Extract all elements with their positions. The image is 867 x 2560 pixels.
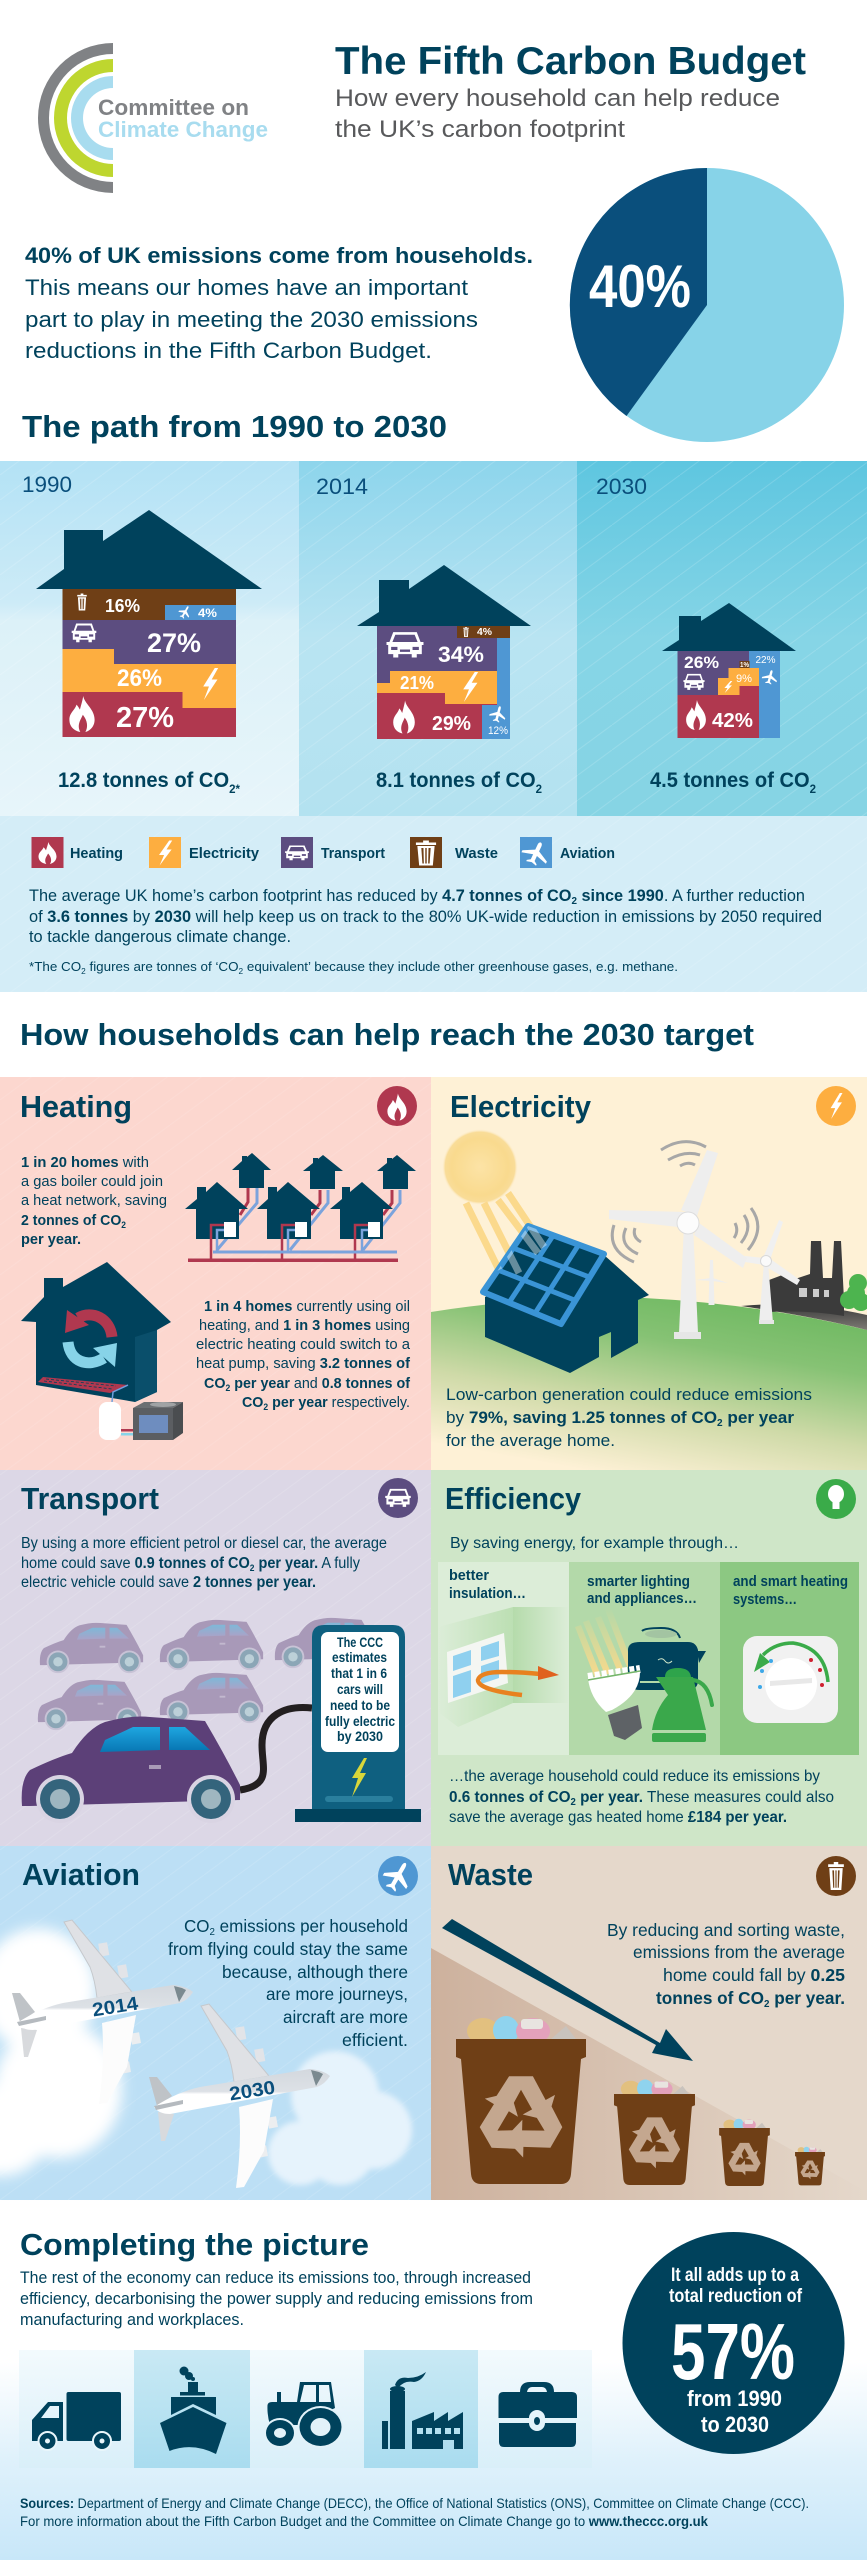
icon: tractor: [264, 2382, 344, 2448]
subtitle: How every household can help reduce: [335, 85, 780, 112]
text: transport: electric vehicle could save 2 tonnes per year.: [21, 1574, 316, 1591]
callout: CCC estimates: The CCC: [337, 1635, 383, 1650]
text: waste: emissions from the average: [633, 1942, 845, 1962]
house 2014: 21%: [400, 673, 434, 693]
callout: 57% total reduction: total reduction of: [669, 2286, 803, 2307]
text: aviation: CO: [184, 1916, 210, 1936]
column: smart heating systems: and smart heating: [733, 1573, 848, 1590]
text: waste: home could fall by 0.25: [663, 1965, 845, 1985]
column: smart heating systems: [720, 1562, 859, 1755]
tonnes label 1990: 2*: [229, 782, 240, 796]
tonnes label 1990: 12.8 tonnes of CO: [58, 769, 237, 792]
icon: heating: [377, 1086, 417, 1126]
explanation text: 2: [571, 896, 577, 907]
house 2030: 42%: [712, 710, 753, 732]
heading: efficiency: Efficiency: [445, 1481, 582, 1516]
callout: CCC estimates: need to be: [330, 1698, 390, 1713]
text: efficiency result: 0.6 tonnes of CO: [449, 1789, 571, 1806]
text: electricity: for the average home.: [446, 1431, 615, 1450]
legend: transport: Transport: [321, 845, 385, 862]
icon: efficiency: [816, 1479, 856, 1519]
text: transport: A fully: [322, 1555, 363, 1572]
text: electricity: Low-carbon generation could reduce emissions: [446, 1385, 812, 1404]
heading: waste: Waste: [448, 1857, 533, 1892]
text: heat network: 1 in 20 homes with: [21, 1154, 149, 1171]
legend: electricity: Electricity: [189, 845, 260, 862]
explanation text: since 1990: [577, 887, 664, 905]
icon: briefcase: [498, 2382, 577, 2447]
illustration: faded cars: [38, 1618, 378, 1730]
house 2014: 29%: [432, 713, 471, 735]
illustration: heat network houses: [185, 1153, 416, 1262]
text: efficiency intro: By saving energy, for example through…: [450, 1535, 739, 1552]
panel: heating: [0, 1077, 431, 1470]
house 2030: 9%: [736, 673, 752, 685]
column: better insulation: better: [449, 1567, 489, 1584]
subtitle: [335, 85, 780, 143]
house 1990: 26%: [117, 665, 162, 692]
text: electricity: per year: [723, 1408, 794, 1427]
text: heat network: a gas boiler could join: [21, 1173, 163, 1190]
panel: 1990: [0, 461, 299, 816]
text: heat pump: [196, 1298, 411, 1412]
text: waste: tonnes of CO: [656, 1988, 766, 2008]
legend: waste: [410, 837, 498, 868]
heading: heating: Heating: [20, 1089, 132, 1124]
text: heat pump: per year: [268, 1394, 328, 1411]
legend: heating: Heating: [70, 845, 123, 862]
text: heat network: 2: [121, 1220, 126, 1230]
heading: transport: Transport: [21, 1481, 159, 1516]
illustration: recycling bins: [456, 2016, 825, 2186]
text: transport: [21, 1535, 387, 1591]
illustration: plane 2014: 2014: [91, 1993, 140, 2021]
legend: waste: Waste: [455, 845, 498, 862]
text: aviation: efficient.: [342, 2030, 408, 2050]
text block: 40% of UK emissions: part to play in meeting the 2030 emissions: [25, 307, 478, 332]
text: waste: 2: [764, 1999, 770, 2010]
column: smart heating systems: systems…: [733, 1591, 797, 1608]
house 1990: [36, 510, 262, 737]
column: smarter lighting and appliances: smarter lighting: [587, 1573, 690, 1590]
text: waste: per year.: [769, 1988, 845, 2008]
panel: completing the picture: [0, 2200, 867, 2560]
column: better insulation: insulation…: [449, 1585, 526, 1602]
illustration: sun: [442, 1129, 518, 1205]
house 2030: 1%: [740, 662, 750, 669]
illustration: sun rays: [466, 1193, 544, 1273]
legend: aviation: Aviation: [560, 845, 615, 862]
text: efficiency result: [449, 1768, 834, 1826]
year label 2030: 2030: [596, 474, 647, 499]
text: heat network: per year.: [21, 1231, 81, 1248]
callout: 57% total reduction: [622, 2232, 844, 2454]
panel: efficiency: [431, 1470, 867, 1846]
year label 1990: 1990: [22, 472, 72, 497]
house 2030: 26%: [684, 653, 719, 672]
text block: 40% of UK emissions: This means our homes have an important: [25, 275, 468, 300]
house 2014: 4%: [477, 627, 492, 638]
text: heat pump: electric heating could switch to a: [196, 1336, 411, 1353]
text block: 40% of UK emissions: 40% of UK emissions come from households.: [25, 243, 533, 268]
heading: path: The path from 1990 to 2030: [22, 409, 447, 444]
footnote: 2: [239, 967, 244, 976]
logo: Committee on Climate Change: [38, 40, 268, 196]
text: heat pump: CO: [204, 1375, 226, 1392]
explanation text: . A further reduction: [664, 887, 807, 905]
legend: aviation: [519, 837, 615, 869]
panel: transport: [0, 1470, 431, 1846]
text block: 40% of UK emissions: [25, 243, 533, 363]
text: rest of economy: efficiency, decarbonising the power supply and reducing emissions from: [20, 2290, 533, 2308]
text: electricity: 2: [717, 1418, 723, 1429]
text: heat network: 2 tonnes of CO: [21, 1212, 128, 1229]
sources: For more information about the Fifth Carbon Budget and the Committee on Climate Change go to www.theccc.org.uk: [20, 2513, 708, 2529]
legend: electricity: [149, 837, 260, 868]
sources: Sources: Department of Energy and Climate Change (DECC), the Office of National Statistics (ONS), Committee on Climate Change (CCC).: [20, 2495, 809, 2511]
legend: heating: [32, 837, 123, 868]
tonnes label 2030: 2: [810, 782, 816, 796]
illustration: house with solar panel: [480, 1223, 649, 1373]
heading: how households can help: How households can help reach the 2030 target: [20, 1017, 754, 1052]
text: transport: home could save 0.9 tonnes of CO: [21, 1555, 258, 1572]
illustration: heat pump house: [21, 1262, 183, 1440]
text: transport: By using a more efficient petrol or diesel car, the average: [21, 1535, 387, 1552]
icon: truck: [32, 2392, 121, 2450]
illustration: plane 2030: [149, 2004, 330, 2188]
house 1990: 27%: [147, 628, 201, 658]
text: aviation: [168, 1916, 408, 2050]
tonnes label 2014: 8.1 tonnes of CO: [376, 769, 543, 792]
callout: CCC estimates: [325, 1635, 395, 1744]
panel: 2014: [299, 461, 577, 816]
callout: 57% total reduction: from 1990: [687, 2386, 782, 2411]
house 2014: 12%: [488, 725, 508, 737]
text: efficiency result: per year.: [576, 1789, 643, 1806]
text: heat pump: 2: [225, 1383, 230, 1393]
text: waste: [607, 1920, 845, 2010]
callout: CCC estimates: estimates: [332, 1650, 387, 1665]
house 2030: 22%: [756, 655, 776, 666]
panel: legend and explanation: [0, 816, 867, 992]
callout: CCC estimates: cars will: [337, 1682, 383, 1697]
text: electricity: by 79%, saving 1.25 tonnes of CO: [446, 1408, 715, 1427]
text: heat pump: 1 in 4 homes currently using oil: [204, 1298, 410, 1315]
footnote: equivalent’ because they include other greenhouse gases, e.g. methane.: [243, 959, 678, 974]
callout: CCC estimates: that 1 in 6: [331, 1666, 387, 1681]
house 1990: 16%: [105, 596, 140, 616]
text: rest of economy: The rest of the economy can reduce its emissions too, through increased: [20, 2269, 531, 2287]
panel: electricity: [431, 1077, 867, 1470]
subtitle: the UK’s carbon footprint: [335, 116, 625, 143]
illustration: plane 2014: [12, 1920, 193, 2104]
column: smarter lighting and appliances: and appliances…: [587, 1590, 697, 1607]
logo: Committee on Climate Change: Climate Change: [98, 117, 268, 142]
text: aviation: aircraft are more: [283, 2007, 408, 2027]
house 1990: 27%: [116, 702, 174, 734]
tonnes label 2014: 2: [536, 782, 542, 796]
text: heat pump: CO: [242, 1394, 264, 1411]
text: heat network: [21, 1154, 167, 1248]
text: waste: By reducing and sorting waste,: [607, 1920, 845, 1940]
footnote: *The CO: [29, 959, 80, 974]
house 2030: [662, 603, 796, 738]
illustration: wind turbines: [609, 1142, 800, 1339]
legend: transport: [281, 837, 385, 868]
illustration: clouds: [0, 1928, 412, 2185]
callout: 57% total reduction: It all adds up to a: [671, 2265, 799, 2286]
illustration: charging cable: [240, 1707, 312, 1790]
explanation text: to tackle dangerous climate change.: [29, 928, 291, 946]
text: heat pump: and 0.8 tonnes of: [294, 1375, 414, 1392]
explanation text: of 3.6 tonnes by 2030 will help keep us on track to the 80% UK-wide reduction in emissions by 2050 required: [29, 908, 822, 926]
panel: aviation: [0, 1846, 431, 2200]
icon: transport: [378, 1478, 418, 1518]
callout: CCC estimates: by 2030: [337, 1729, 383, 1744]
text: efficiency result: 2: [571, 1797, 576, 1808]
text: heat network: a heat network, saving: [21, 1192, 167, 1209]
text: efficiency result: …the average household could reduce its emissions by: [449, 1768, 820, 1785]
text: efficiency result: save the average gas heated home £184 per year.: [449, 1809, 787, 1826]
heading: completing the picture: Completing the picture: [20, 2227, 369, 2262]
text: efficiency result: These measures could also: [647, 1789, 843, 1806]
illustration: charging point: [295, 1625, 421, 1822]
icon tiles: [19, 2350, 592, 2468]
text: transport: per year.: [254, 1555, 318, 1572]
title: The Fifth Carbon Budget: [335, 40, 806, 83]
tonnes label 2030: 4.5 tonnes of CO: [650, 769, 817, 792]
icon: ship: [160, 2366, 226, 2454]
house 1990: 4%: [198, 606, 217, 620]
column: smarter lighting and appliances: [569, 1562, 720, 1755]
text: aviation: emissions per household: [215, 1916, 408, 1936]
text: rest of economy: manufacturing and workplaces.: [20, 2311, 244, 2329]
illustration: electric car: [22, 1717, 240, 1823]
text: rest of economy: [20, 2269, 533, 2329]
sources: [20, 2495, 809, 2529]
house 2014: 34%: [438, 642, 484, 667]
icon: waste: [816, 1856, 856, 1896]
explanation text: The average UK home’s carbon footprint has reduced by 4.7 tonnes of CO: [29, 887, 573, 905]
text: transport: 2: [250, 1563, 254, 1573]
pie chart: 40%: 40%: [589, 253, 691, 320]
icon: aviation: [378, 1856, 418, 1896]
heading: aviation: Aviation: [22, 1857, 140, 1892]
panel: 2030: [577, 461, 867, 816]
text block: 40% of UK emissions: reductions in the Fifth Carbon Budget.: [25, 338, 432, 363]
text: heat pump: 2: [263, 1402, 268, 1412]
heading: electricity: Electricity: [450, 1089, 592, 1124]
footnote: 2: [81, 967, 86, 976]
callout: 57% total reduction: to 2030: [701, 2412, 769, 2437]
illustration: hill: [431, 1298, 867, 1470]
illustration: plane 2030: 2030: [228, 2078, 277, 2105]
icon: electricity: [816, 1086, 856, 1126]
text: electricity: [446, 1385, 812, 1450]
panel: waste: [431, 1846, 867, 2200]
text: heat pump: heating, and 1 in 3 homes using: [199, 1317, 410, 1334]
arrow: falling waste: [442, 1919, 693, 2061]
pie chart: 40%: [570, 168, 844, 442]
year label 2014: 2014: [316, 474, 368, 499]
text: aviation: 2: [210, 1927, 215, 1938]
callout: CCC estimates: fully electric: [325, 1714, 395, 1729]
callout: 57% total reduction: 57%: [671, 2307, 795, 2396]
text: aviation: because, although there: [222, 1962, 408, 1982]
footnote: figures are tonnes of ‘CO: [86, 959, 239, 974]
icon: factory: [382, 2372, 463, 2449]
house 2014: [357, 565, 531, 739]
illustration: factory: [741, 1241, 867, 1330]
column: better insulation: [438, 1562, 569, 1755]
text: heat pump: heat pump, saving 3.2 tonnes of: [196, 1355, 411, 1372]
explanation text: [29, 887, 822, 946]
text: aviation: are more journeys,: [266, 1984, 408, 2004]
logo: Committee on Climate Change: Committee on: [98, 95, 249, 120]
text: aviation: from flying could stay the same: [168, 1939, 408, 1959]
text: heat pump: respectively.: [332, 1394, 414, 1411]
text: heat pump: per year: [230, 1375, 290, 1392]
